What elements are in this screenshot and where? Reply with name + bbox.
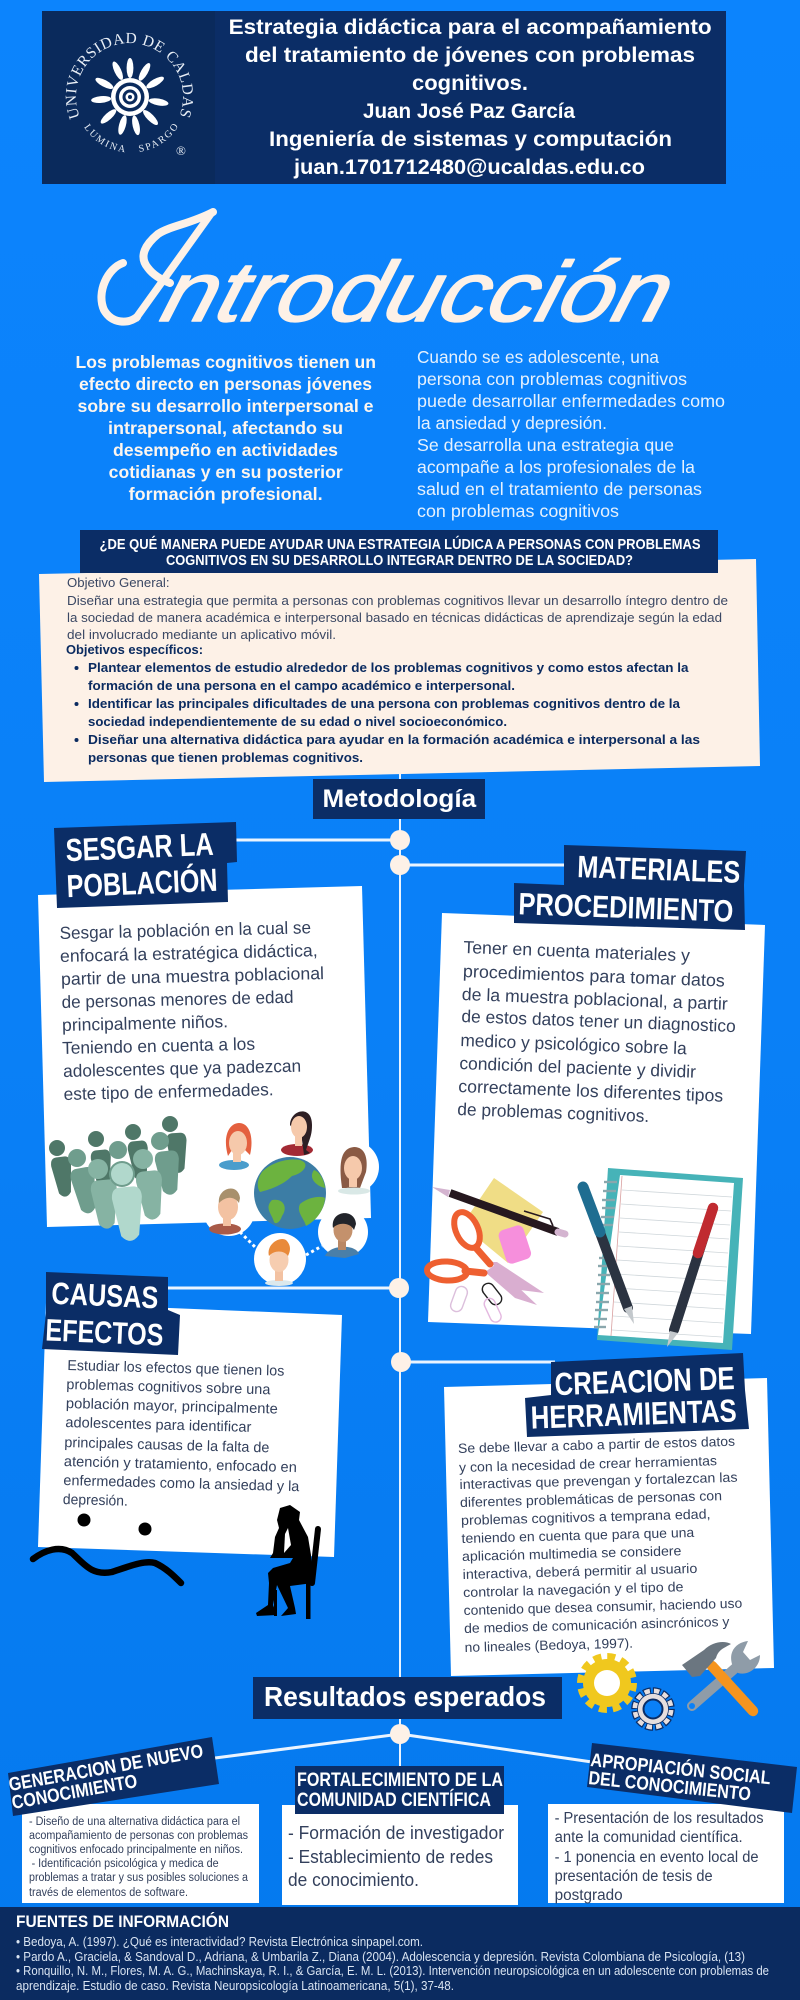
apropiacion heading: APROPIACIÓN SOCIAL [589,1749,772,1789]
header title text: Estrategia didáctica para el acompañamiento [229,15,712,39]
references [16,1935,769,1993]
generacion body text: problemas a tratar y sus posibles soluciones a [29,1872,249,1884]
apropiacion body text: - Presentación de los resultados [555,1810,764,1827]
sesgar body text: de personas menores de edad [61,987,294,1012]
icon: grey gear [635,1691,671,1727]
timeline connectors [160,760,592,1770]
research question: COGNITIVOS EN SU DESARROLLO INTEGRAR DENTRO DE LA SOCIEDAD? [166,552,633,569]
icon: people around the globe [203,1111,379,1286]
causas body text: población mayor, principalmente [66,1396,278,1418]
panel: creacion de herramientas [444,1353,774,1727]
materiales body text [457,937,736,1126]
causas body text: Estudiar los efectos que tienen los [67,1358,285,1380]
objetivos especificos: sociedad independientemente de su edad o nivel socioeconómico. [88,714,507,729]
herramientas body text: contenido que desea consumir, haciendo uso [463,1596,742,1618]
timeline nodes [389,830,411,1744]
footer: sources [0,1907,800,2000]
herramientas body text: no lineales (Bedoya, 1997). [464,1636,633,1655]
heading: materiales procedimiento: PROCEDIMIENTO [518,886,734,929]
causas body text [63,1358,300,1510]
header title text: Juan José Paz García [363,99,576,123]
result card: generacion de nuevo conocimiento [7,1737,259,1903]
apropiacion heading [587,1743,797,1813]
herramientas body text: interactivas que prevengan y fortalezcan las [459,1470,738,1492]
generacion body text [29,1816,249,1899]
heading: causas efectos: EFECTOS [45,1312,164,1353]
materiales body text: Tener en cuenta materiales y [463,937,690,965]
herramientas body text: problemas cognitivos a temprana edad, [461,1506,711,1528]
panel: materiales procedimiento [427,845,765,1350]
result card: fortalecimiento [282,1766,518,1905]
apropiacion body text: ante la comunidad científica. [555,1829,743,1846]
icon: red hair woman [219,1123,252,1170]
heading: materiales procedimiento: MATERIALES [577,849,741,890]
herramientas body text: Se debe llevar a cabo a partir de estos datos [458,1434,735,1456]
objetivos especificos: personas que tienen problemas cognitivos. [88,750,363,765]
generacion heading: CONOCIMIENTO [10,1771,139,1814]
objetivos especificos [66,642,700,765]
objetivos especificos: Diseñar una alternativa didáctica para ayudar en la formación académica e interpersonal a las [88,732,700,747]
generacion body text: través de elementos de software. [29,1887,188,1899]
sesgar body text: Sesgar la población en la cual se [59,917,311,943]
fortalecimiento body text: - Establecimiento de redes [288,1847,493,1867]
references: • Bedoya, A. (1997). ¿Qué es interactividad? Revista Electrónica sinpapel.com. [16,1935,423,1949]
objetivo general [67,575,728,642]
generacion body text: cognitivos enfocado principalmente en niños. [29,1844,243,1856]
generacion body text: - Diseño de una alternativa didáctica para el [29,1816,240,1828]
herramientas body text: interactiva, deberá permitir al usuario [462,1561,697,1582]
research question: ¿DE QUÉ MANERA PUEDE AYUDAR UNA ESTRATEGIA LÚDICA A PERSONAS CON PROBLEMAS [100,535,700,553]
fortalecimiento heading [295,1766,504,1814]
intro paragraph left: Los problemas cognitivos tienen un [76,352,376,372]
icon: black pen [432,1187,565,1234]
intro paragraph right: la ansiedad y depresión. [417,413,607,433]
apropiacion body text: presentación de tesis de [555,1868,713,1885]
herramientas body text: controlar la navegación y el tipo de [463,1579,684,1600]
sesgar body text: adolescentes que ya padezcan [63,1056,301,1081]
objetivos especificos: Plantear elementos de estudio alrededor de los problemas cognitivos y como estos afectan la [88,660,689,675]
icon: blond man [209,1189,241,1234]
panel: causas efectos [33,1272,342,1619]
header title text: del tratamiento de jóvenes con problemas [245,43,695,67]
icon: notebook and pens [427,1168,743,1350]
fortalecimiento heading: COMUNIDAD CIENTÍFICA [297,1789,491,1811]
heading: causas efectos: CAUSAS [51,1276,159,1315]
materiales body text: procedimientos para tomar datos [463,961,725,991]
sesgar body text: enfocará la estratégica didáctica, [60,940,318,966]
materiales body text: de estos datos tener un diagnostico [461,1006,736,1036]
fortalecimiento body text: de conocimiento. [288,1870,419,1890]
intro paragraph left: formación profesional. [129,484,323,504]
heading: causas efectos [42,1272,180,1355]
icon: hammer and wrench [682,1641,760,1711]
heading: Metodología: Metodología [322,785,477,813]
heading: Resultados esperados: Resultados esperados [264,1681,546,1712]
heading: sesgar la población [54,822,237,908]
objetivos especificos: Objetivos específicos: [66,642,203,657]
sesgar body text: este tipo de enfermedades. [63,1079,274,1104]
sesgar body text: Teniendo en cuenta a los [62,1034,255,1058]
objetivo general: la sociedad de manera académica e interpersonal basado en técnicas didácticas de aprendizaje según la edad [67,610,722,625]
generacion body text: - Identificación psicológica y medica de [32,1858,219,1870]
sesgar body text: principalmente niños. [62,1011,228,1035]
causas body text: adolescentes para identificar [65,1415,252,1436]
panel: objectives [39,559,760,782]
herramientas body text: y con la necesidad de crear herramientas [459,1453,717,1475]
apropiacion body text: - 1 ponencia en evento local de [555,1849,759,1866]
heading: creacion de herramientas: CREACION DE [554,1360,735,1402]
intro paragraph right: puede desarrollar enfermedades como [417,391,725,411]
script title: Introducción: I [106,183,235,354]
sesgar body text: partir de una muestra poblacional [61,963,324,989]
icon: seated woman silhouette [256,1505,318,1619]
apropiacion body text: postgrado [555,1887,623,1904]
fortalecimiento body text: - Formación de investigador [288,1823,504,1843]
intro paragraph right: Se desarrolla una estrategia que [417,435,674,455]
header title text: juan.1701712480@ucaldas.edu.co [293,155,645,179]
intro paragraph right: Cuando se es adolescente, una [417,347,659,367]
intro paragraph left: cotidianas y en su posterior [109,462,343,482]
objetivos especificos: Identificar las principales dificultades de una persona con problemas cognitivos dentro de la [88,696,681,711]
header title text [229,15,712,179]
causas body text: enfermedades como la ansiedad y la [63,1473,300,1495]
icon: orange hair man [265,1239,293,1286]
apropiacion body text [555,1810,764,1904]
heading: creacion de herramientas: HERRAMIENTAS [530,1392,737,1436]
causas body text: problemas cognitivos sobre una [66,1377,271,1398]
materiales body text: correctamente los diferentes tipos [458,1076,724,1106]
heading: sesgar la población: POBLACIÓN [66,862,218,904]
script title: Introducción [101,183,685,354]
heading: sesgar la población: SESGAR LA [65,826,214,868]
materiales body text: de problemas cognitivos. [457,1099,650,1126]
icon: dark hair woman [281,1111,313,1156]
causas body text: principales causas de la falta de [64,1435,270,1456]
references: aprendizaje. Estudio de caso. Revista Neuropsicología Latinoamericana, 5(1), 37-48. [16,1979,454,1993]
intro paragraph left: intrapersonal, afectando su [108,418,343,438]
sesgar body text [59,917,324,1104]
icon: yellow gear [580,1656,634,1710]
intro paragraph left: desempeño en actividades [113,440,338,460]
apropiacion heading: DEL CONOCIMIENTO [587,1768,752,1805]
university logo: LUMINA SPARGO [84,123,178,152]
header title text: Ingeniería de sistemas y computación [269,127,672,151]
intro paragraph right [417,347,725,521]
materiales body text: medico y psicológico sobre la [460,1030,687,1058]
materiales body text: de la muestra poblacional, a partir [462,984,728,1014]
objetivo general: Objetivo General: [67,575,170,590]
icon: globe [254,1157,326,1229]
objetivos especificos: formación de una persona en el campo académico e interpersonal. [88,678,515,693]
icon: yellow notepad [462,1178,543,1263]
icon: scissors [427,1208,544,1305]
generacion heading: GENERACION DE NUEVO [7,1741,205,1796]
intro paragraph right: con problemas cognitivos [417,501,619,521]
header title text: cognitivos. [412,71,528,95]
icon: red pen [667,1208,713,1347]
heading: creacion de herramientas [525,1353,749,1437]
script title: Introducción: ntroducción [153,245,685,340]
herramientas body text: diferentes problemáticas de personas con [460,1488,722,1510]
objetivo general: Diseñar una estrategia que permita a personas con problemas cognitivos llevar un desarrollo íntegro dentro de [67,593,728,608]
footer title: FUENTES DE INFORMACIÓN [16,1912,229,1931]
panel: sesgar la población [38,822,379,1286]
intro paragraph left: efecto directo en personas jóvenes [79,374,372,394]
herramientas body text: aplicación multimedia se considere [462,1543,682,1564]
intro paragraph right: persona con problemas cognitivos [417,369,687,389]
university logo: UNIVERSIDAD DE CALDAS [66,32,193,120]
intro paragraph right: acompañe a los profesionales de la [417,457,695,477]
heading: Metodología [313,779,485,819]
generacion heading [7,1737,219,1816]
references: • Pardo A., Graciela, & Sandoval D., Adriana, & Umbarila Z., Diana (2004). Adolescencia y depresión. Revista Colombiana de Psicología, (13) [16,1950,745,1964]
causas body text: atención y tratamiento, enfocado en [64,1454,297,1476]
result card: apropiacion social [548,1743,797,1904]
objetivo general: del involucrado mediante un aplicativo móvil. [67,627,336,642]
intro paragraph right: salud en el tratamiento de personas [417,479,702,499]
fortalecimiento heading: FORTALECIMIENTO DE LA [297,1770,503,1791]
causas body text: depresión. [63,1492,128,1510]
university logo [42,11,215,184]
heading: materiales procedimiento [514,845,746,930]
header banner [42,11,726,184]
icon: crowd of people [49,1116,189,1242]
herramientas body text: teniendo en cuenta que para que una [461,1525,695,1546]
icon: paper clips [449,1281,504,1324]
herramientas body text [458,1434,742,1655]
fortalecimiento body text [288,1823,504,1890]
university logo: ® [176,143,186,158]
research question [80,530,718,573]
icon: blue pen [583,1187,634,1324]
materiales body text: condición del paciente y dividir [459,1053,696,1082]
icon: brown hair woman [338,1147,370,1194]
intro paragraph left [76,352,376,504]
generacion body text: acompañamiento de personas con problemas [29,1830,248,1842]
herramientas body text: de medios de comunicación asincrónicos y [464,1614,730,1636]
intro paragraph left: sobre su desarrollo interpersonal e [78,396,374,416]
icon: sad face doodle [33,1514,181,1583]
icon: pink eraser [497,1224,533,1265]
icon: dark skin man [325,1213,359,1258]
